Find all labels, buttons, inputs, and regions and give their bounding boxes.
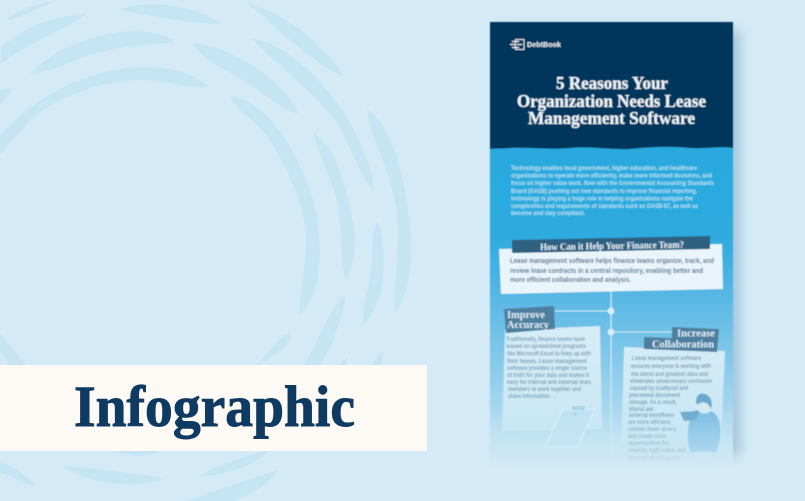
intro paragraph (511, 165, 714, 217)
card text: like Microsoft Excel to keep up with (507, 350, 591, 358)
card text: contain fewer errors, (628, 426, 677, 433)
card text: internal and (629, 406, 653, 413)
card text: strategic thinking and (628, 455, 680, 462)
title: Organization Needs Lease (517, 91, 706, 111)
card text: the latest and greatest data and (631, 371, 708, 378)
summary card: Lease management software helps finance teams organize, track, and (510, 256, 714, 265)
card text: Traditionally, finance teams have (506, 336, 585, 343)
infographic document preview (490, 22, 733, 467)
label: Improve Accuracy: Accuracy (507, 320, 550, 331)
summary card: review lease contracts in a central repository, enabling better and (510, 266, 703, 275)
intro paragraph: Technology enables local government, higher education, and healthcare (511, 165, 697, 172)
panel: Increase Collaboration (621, 347, 725, 463)
summary card: more efficient collaboration and analysis. (510, 275, 631, 284)
card text: software provides a single source (507, 365, 587, 372)
label: Increase Collaboration: Increase (677, 328, 715, 340)
card text: their leases. Lease management (507, 358, 588, 365)
card background (502, 326, 602, 432)
card text: caused by scattered and (630, 385, 688, 392)
banner: Infographic label: Infographic (74, 374, 355, 439)
card text: Lease management software (632, 355, 701, 362)
panel: Improve Accuracy (502, 326, 602, 447)
intro paragraph: complexities and requirements of standards such as GASB-87, as well as (511, 203, 698, 210)
logo: DebtBook (510, 40, 561, 50)
card text: eliminates unnecessary confusion (630, 378, 712, 385)
label: Improve Accuracy (504, 306, 555, 333)
icon: clipboard (545, 406, 595, 447)
card text (506, 336, 591, 400)
decorative brush-stroke rings (0, 1, 411, 501)
card text: are more efficient, (628, 419, 671, 426)
icon: ledger book (510, 40, 524, 50)
title: Management Software (528, 108, 695, 128)
card text: share information. (508, 393, 551, 400)
card text: piecemeal document (629, 392, 681, 399)
card text: creative, high-value, and (628, 447, 686, 454)
label: Increase Collaboration: Collaboration (652, 340, 714, 350)
intro paragraph: technology is playing a huge role in helping organizations navigate the (511, 196, 693, 202)
banner: Infographic label (0, 365, 427, 451)
card text: and create more (628, 433, 666, 440)
card text: external workflows (629, 412, 674, 419)
navy header panel (490, 22, 733, 149)
bottom fade overlay (490, 410, 733, 467)
document drop shadow (498, 30, 740, 455)
card background (621, 347, 725, 462)
card text: storage. As a result, (629, 399, 677, 406)
intro paragraph: organizations to operate more efficiently, make more informed decisions, and (511, 172, 712, 180)
card text: members to work together and (508, 386, 581, 393)
label: Improve Accuracy: Improve (507, 310, 545, 321)
card text: easy for internal and external team (507, 379, 591, 386)
summary card (499, 244, 723, 294)
intro paragraph: become and stay compliant. (511, 210, 585, 217)
logo: DebtBook: DebtBook (527, 40, 561, 49)
connector line and nodes (555, 290, 673, 462)
title: 5 Reasons Your (556, 73, 668, 93)
card text (628, 355, 712, 462)
card text: leaned on spreadsheet programs (506, 343, 586, 350)
heading band: How Can it Help Your Finance Team?: How Can it Help Your Finance Team? (540, 240, 684, 253)
document body gradient (490, 140, 733, 466)
title (517, 73, 706, 128)
label: Increase Collaboration (644, 327, 719, 352)
card text: ensures everyone is working with (631, 363, 711, 370)
heading band: How Can it Help Your Finance Team? (512, 236, 710, 253)
intro paragraph: Board (GASB) pushing out new standards to improve financial reporting, (511, 188, 697, 195)
card text: opportunities for (628, 440, 669, 447)
intro paragraph: focus on higher value work. Now with the Governmental Accounting Standards (511, 180, 714, 187)
icon: person holding laptop (680, 393, 720, 463)
card text: of truth for your data and makes it (507, 372, 590, 379)
